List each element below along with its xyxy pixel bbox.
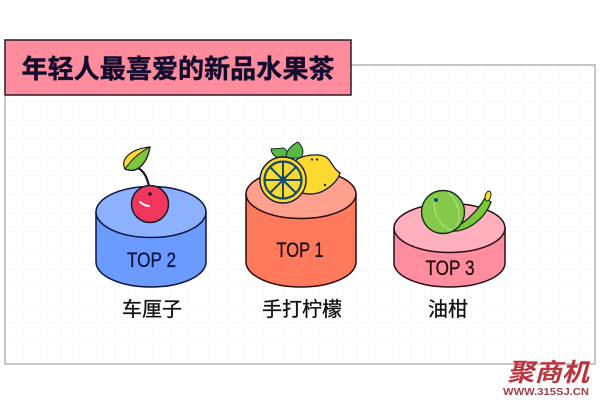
panel: grid background	[5, 65, 595, 364]
blue cylinder: TOP 2: TOP 2	[127, 249, 176, 272]
icon: lemon	[260, 142, 340, 203]
label: 手打柠檬: 手打柠檬	[262, 298, 342, 321]
icon: green citrus	[422, 190, 492, 234]
icon: cherry	[124, 147, 168, 222]
title banner: 年轻人最喜爱的新品水果茶	[22, 54, 334, 84]
watermark logo: 聚商机	[507, 359, 591, 387]
label: 车厘子: 车厘子	[122, 298, 182, 321]
watermark logo	[503, 359, 600, 402]
pink cylinder: TOP 3	[394, 204, 505, 287]
label: 油柑: 油柑	[428, 298, 468, 321]
blue cylinder: TOP 2	[96, 186, 206, 287]
watermark logo: WWW.315SJ.CN	[503, 387, 589, 398]
pink cylinder: TOP 3: TOP 3	[426, 257, 474, 280]
orange cylinder: TOP 1: TOP 1	[276, 239, 324, 262]
orange cylinder: TOP 1	[246, 170, 356, 287]
title banner	[5, 40, 351, 95]
